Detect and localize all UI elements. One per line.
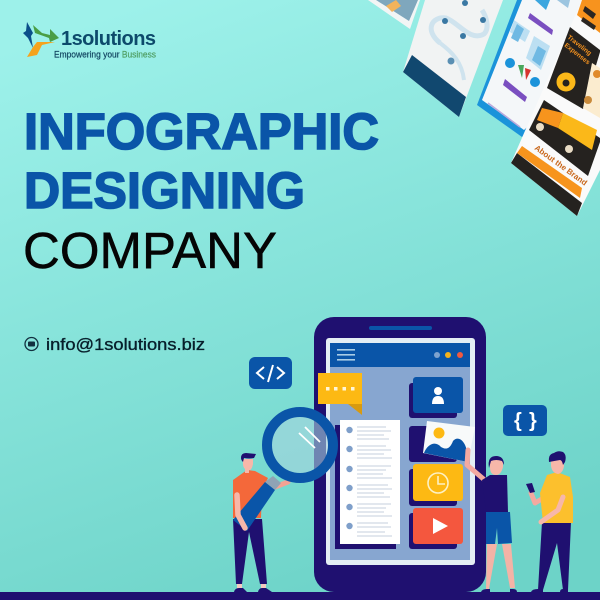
head	[489, 456, 504, 475]
man with phone	[526, 451, 573, 592]
head	[241, 453, 256, 473]
sample card 4: Traveling	[566, 34, 593, 57]
head	[549, 451, 566, 474]
raised arm	[531, 493, 545, 503]
top	[482, 475, 508, 512]
button: hidden behind photo	[409, 426, 457, 462]
infographic samples collage	[368, 0, 600, 216]
phone screen frame	[326, 338, 475, 565]
title line 2: DESIGNING	[24, 162, 305, 219]
photo card	[423, 421, 475, 462]
feet	[237, 584, 266, 589]
document panel	[335, 420, 400, 549]
logo icon: blue arrow	[23, 22, 33, 48]
code tag badge	[249, 357, 292, 389]
title	[23, 103, 379, 279]
phone body	[314, 317, 486, 592]
logo wordmark: 1solutions	[61, 28, 156, 50]
button: profile	[409, 377, 463, 418]
shirt	[540, 472, 573, 523]
legs	[233, 519, 267, 584]
lower arm	[237, 495, 245, 528]
magnifier	[233, 412, 333, 531]
legs	[486, 544, 497, 589]
arm holding handle	[275, 482, 288, 487]
contact email	[25, 335, 205, 354]
button: play	[409, 508, 463, 549]
chat bubble	[318, 373, 362, 415]
title line 1: INFOGRAPHIC	[24, 103, 379, 160]
logo icon: orange arrow	[27, 42, 55, 57]
logo tagline: Empowering your Business	[54, 50, 156, 60]
phone speaker	[369, 326, 432, 330]
sample card 4: Expenses	[563, 42, 591, 66]
phone screen	[330, 343, 470, 560]
button: clock	[409, 464, 463, 506]
sample card 2	[403, 0, 503, 117]
lower arm	[541, 497, 563, 522]
legs	[538, 522, 571, 590]
arm	[467, 450, 487, 482]
title line 3: COMPANY	[23, 222, 277, 279]
shoes	[531, 589, 568, 592]
logo	[23, 22, 156, 60]
sample card 3	[477, 0, 600, 137]
sample card 4	[511, 0, 600, 216]
curly braces badge: }	[529, 410, 537, 432]
phone in hand	[526, 483, 535, 493]
shirt	[233, 470, 268, 518]
screen header	[330, 343, 470, 367]
ground bar	[0, 592, 600, 600]
sample card 1	[368, 0, 420, 29]
curly braces badge: {	[514, 410, 522, 432]
email address: info@1solutions.biz	[46, 335, 205, 354]
curly braces badge	[503, 405, 547, 436]
phone illustration	[314, 317, 486, 592]
shorts	[486, 512, 512, 544]
sample card 4: About the Brand	[533, 143, 589, 188]
shoes	[481, 589, 517, 592]
icon: email	[25, 338, 38, 350]
logo icon: green arrow	[33, 25, 59, 42]
person with magnifier	[233, 412, 333, 592]
woman holding photo	[467, 450, 517, 592]
